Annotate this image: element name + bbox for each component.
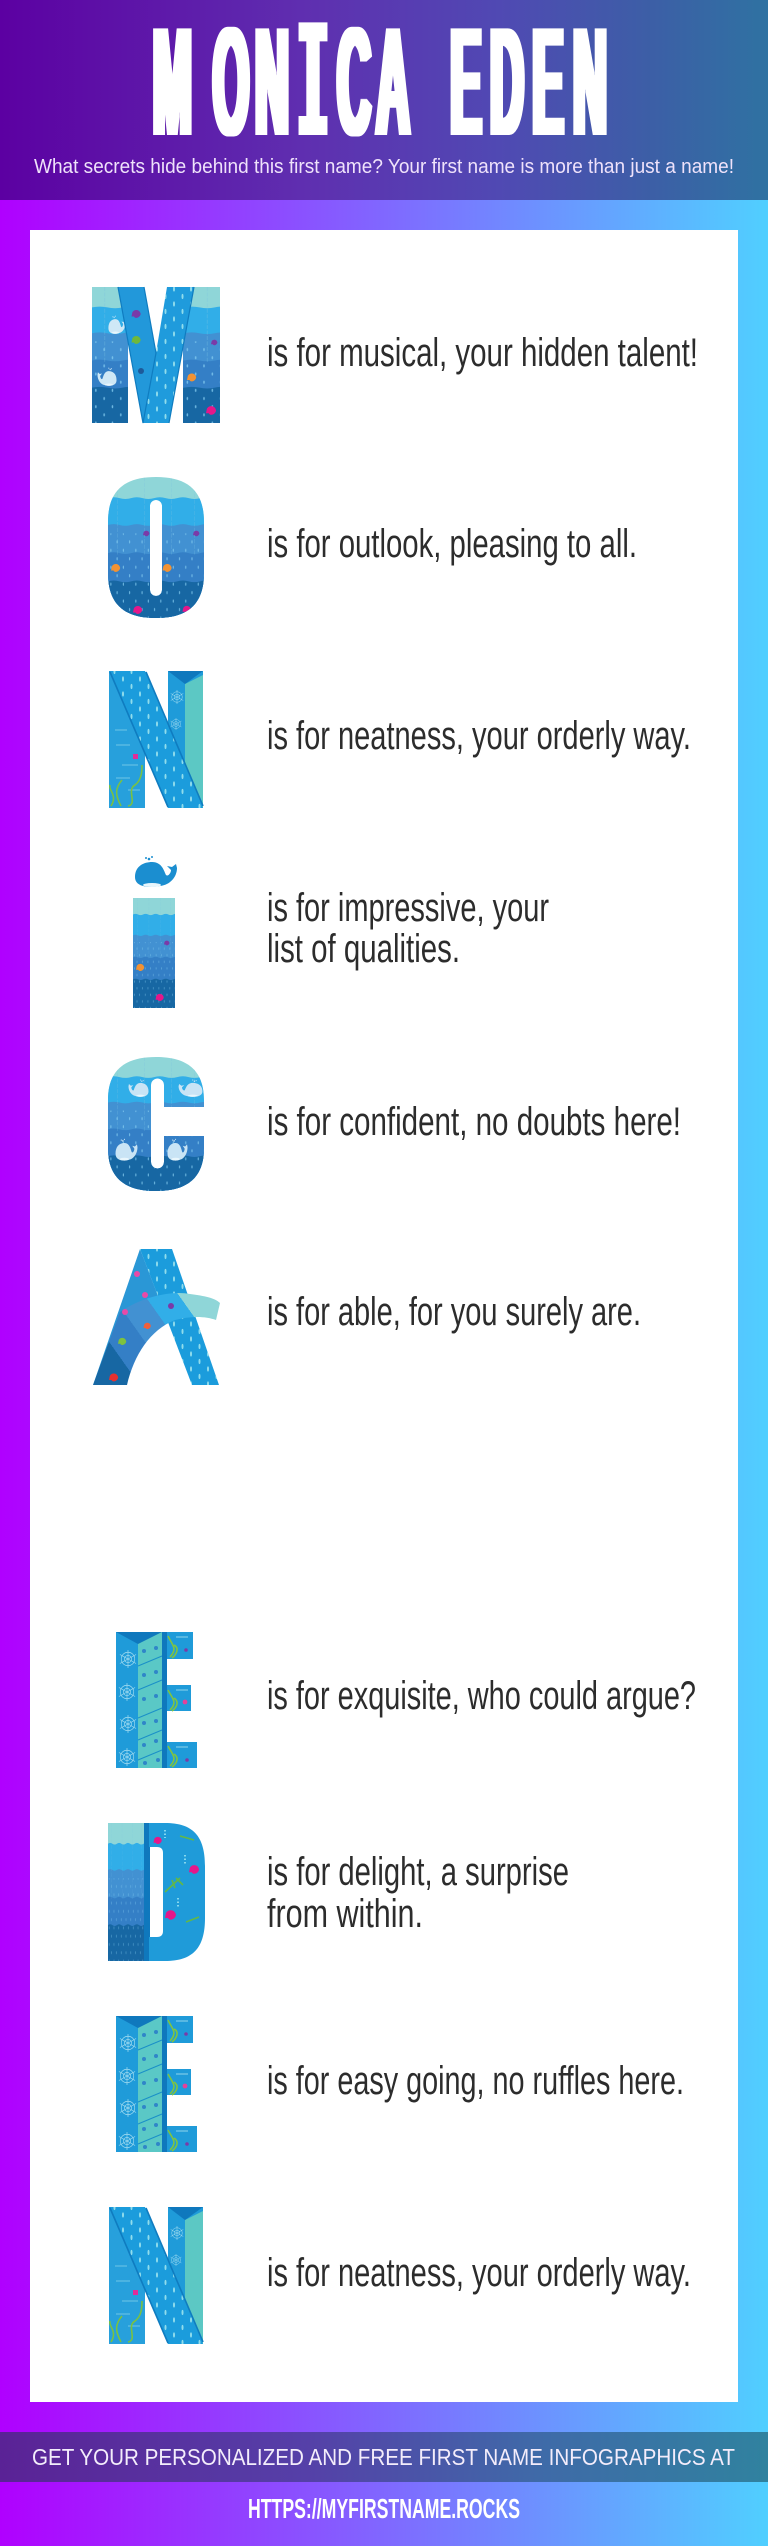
letter D icon — [108, 1823, 205, 1961]
text: O: is for outlook, pleasing to all. — [267, 522, 637, 566]
text: I: list of qualities. — [267, 927, 460, 971]
text: D: from within. — [267, 1892, 423, 1936]
subtitle: What secrets hide behind this first name? Your first name is more than just a name! — [34, 156, 734, 178]
letter N icon — [109, 671, 203, 808]
letter N icon (second) — [109, 2207, 203, 2344]
white content panel — [30, 230, 738, 2402]
letter I icon with whale — [133, 856, 178, 1008]
text: I — [267, 886, 549, 971]
letter O icon — [108, 477, 212, 618]
text: I: is for impressive, your — [267, 886, 549, 930]
letter M icon — [92, 287, 230, 423]
header band — [0, 0, 768, 200]
text: D: is for delight, a surprise — [267, 1850, 569, 1894]
title: CA EDEN — [337, 0, 607, 169]
footer URL: HTTPS://MYFIRSTNAME.ROCKS — [248, 2493, 520, 2524]
text: A: is for able, for you surely are. — [267, 1290, 641, 1334]
letter A icon — [93, 1249, 220, 1385]
title — [153, 0, 607, 186]
footer call-to-action band — [0, 2432, 768, 2482]
letter E icon (second) — [116, 2016, 197, 2152]
text: D — [267, 1850, 569, 1936]
letter E icon — [116, 1632, 197, 1768]
letter C icon — [108, 1057, 212, 1191]
title: MON — [153, 0, 289, 169]
